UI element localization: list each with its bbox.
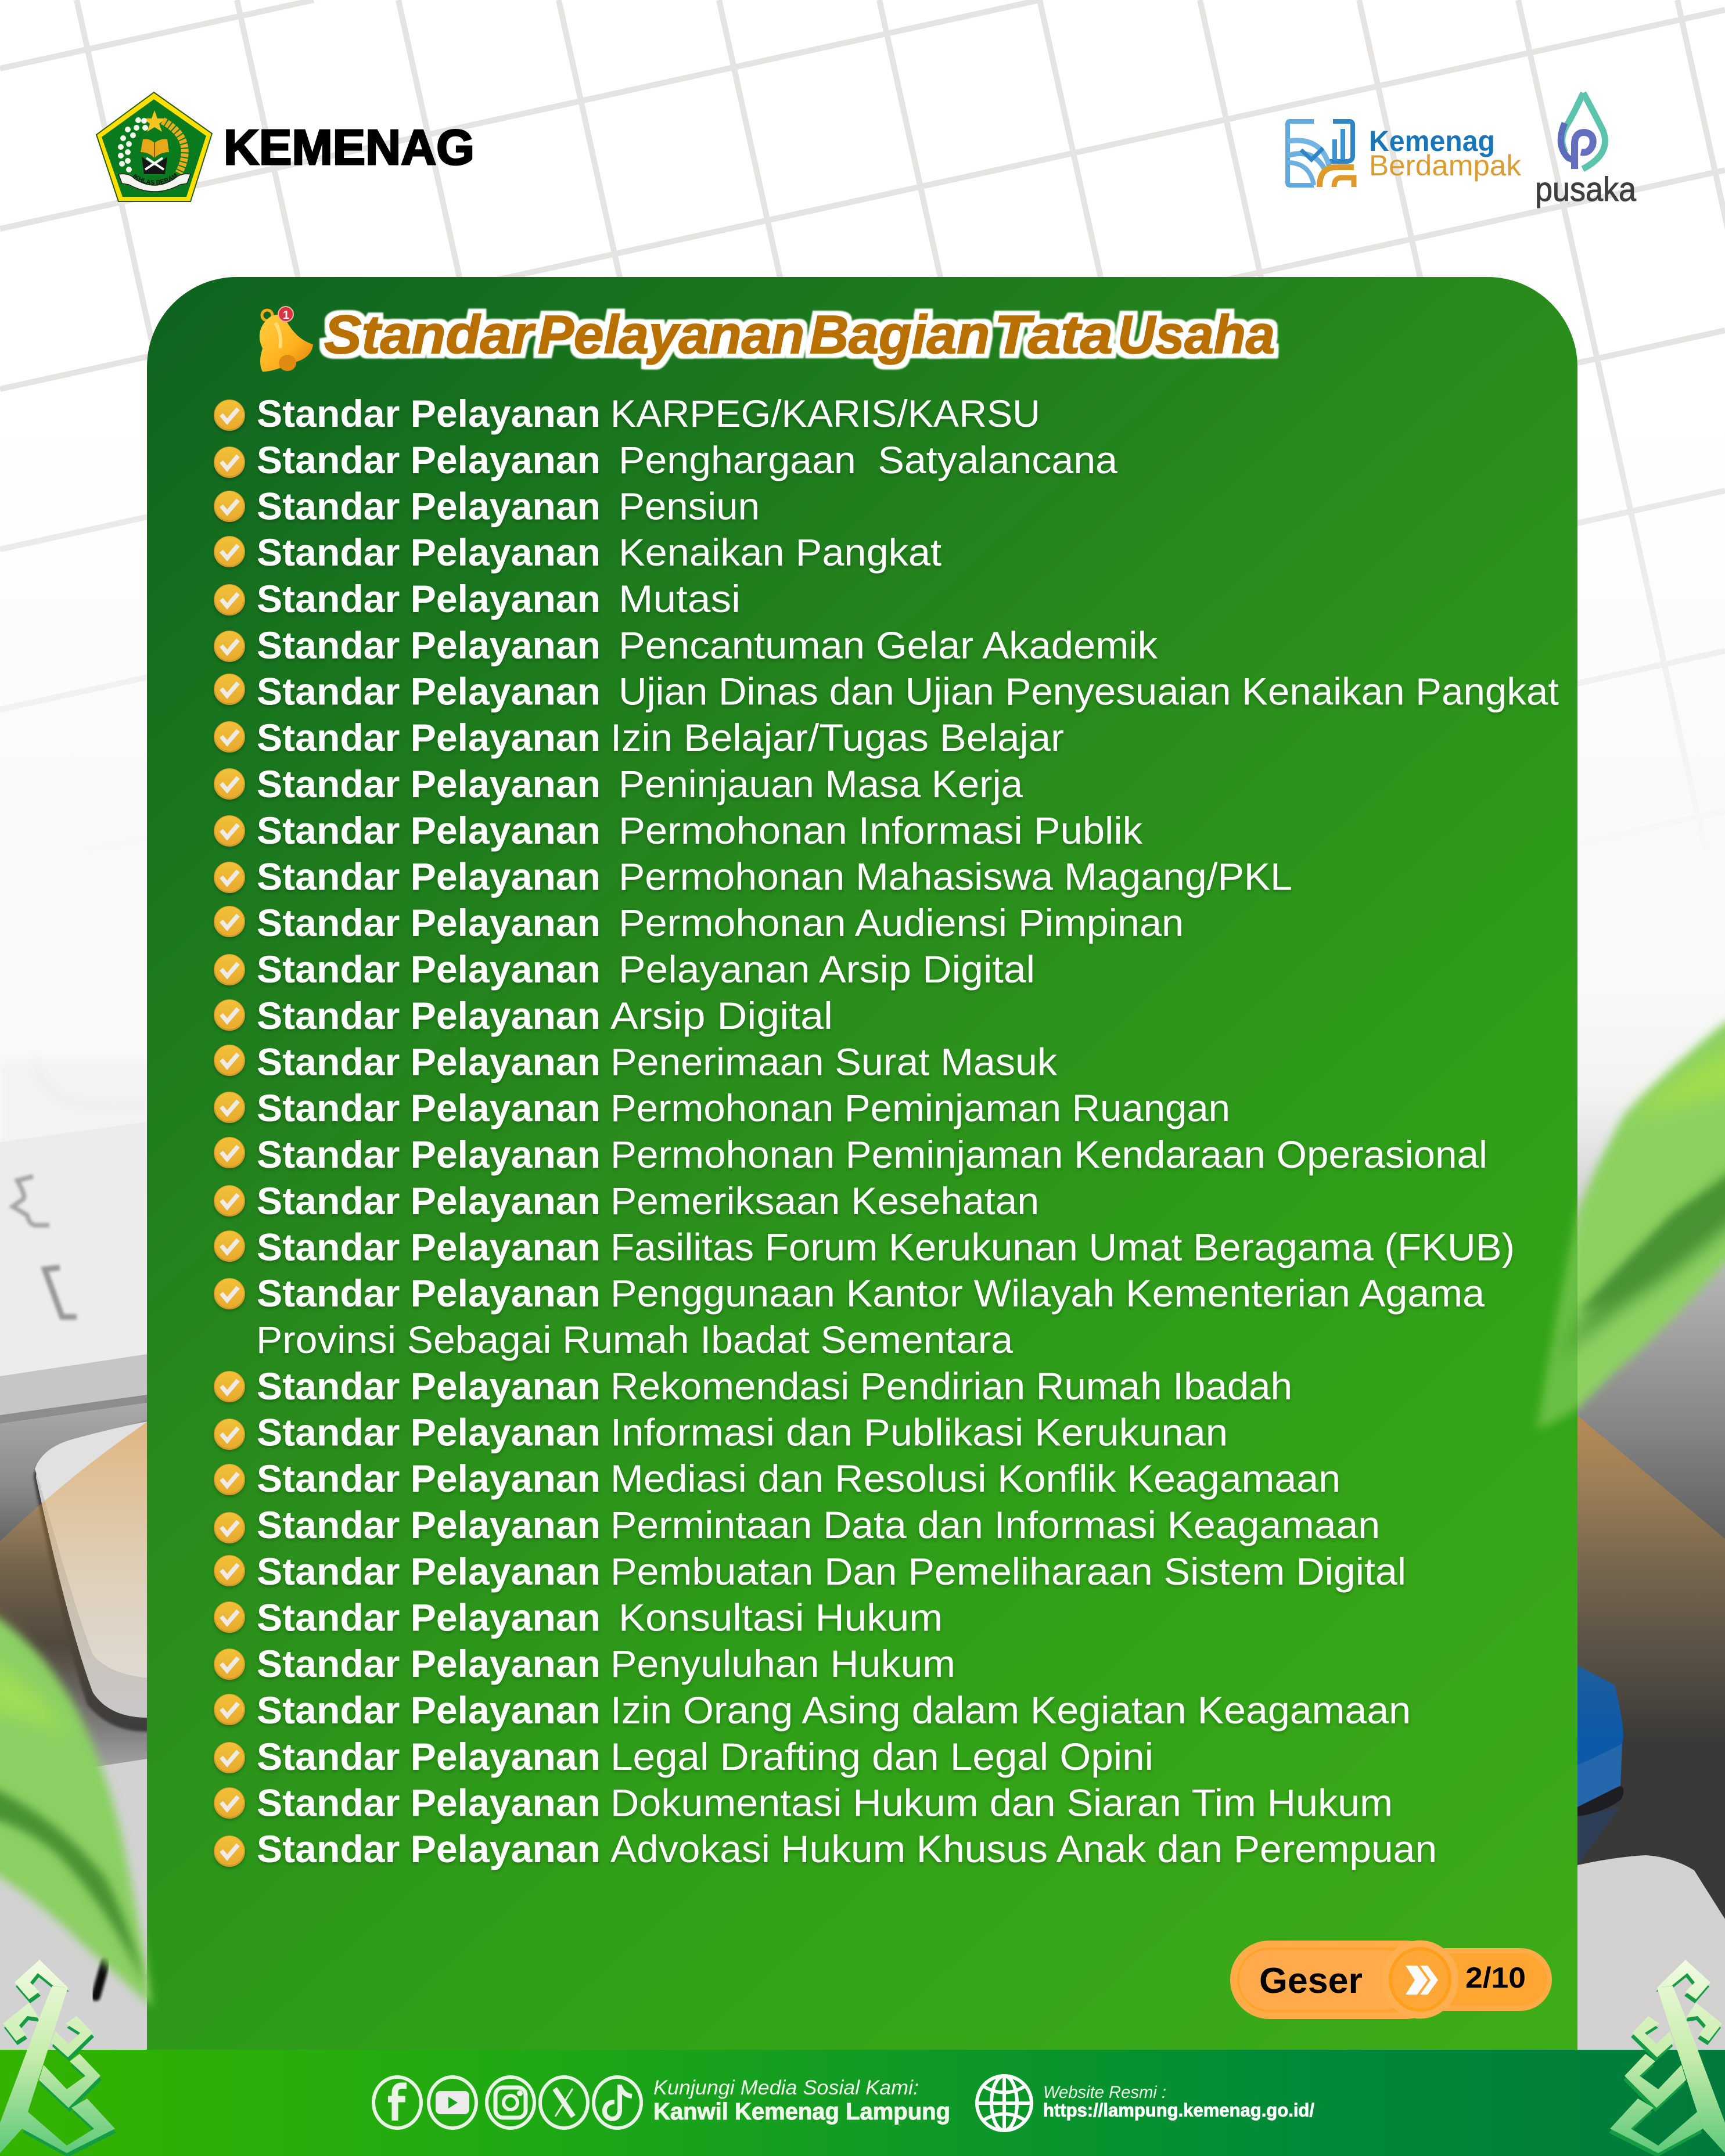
list item: Izin Orang Asing: Standar Pelayanan [257, 1689, 601, 1732]
ornament: bottom-left [0, 1960, 116, 2156]
list item: Advokasi Hukum [214, 1827, 1437, 1870]
list item: Izin Belajar: Izin Belajar/Tugas Belajar [610, 716, 1064, 759]
background: translucent tan dome [0, 1416, 1725, 1800]
list item: Fasilitas FKUB: Standar Pelayanan [257, 1225, 601, 1268]
list item: Penggunaan Kantor Wilayah: Penggunaan Kantor Wilayah Kementerian Agama [610, 1272, 1485, 1315]
list item: Informasi dan Publikasi Kerukunan: Standar Pelayanan [257, 1411, 601, 1454]
service standards checklist [214, 392, 1559, 1870]
list item: Pemeriksaan Kesehatan: Pemeriksaan Kesehatan [610, 1179, 1039, 1222]
list item: Pelayanan Arsip Digital: Pelayanan Arsip Digital [619, 948, 1035, 991]
caption line: Kunjungi Media Sosial Kami: Kunjungi Media Sosial Kami: [653, 2076, 919, 2099]
list item: Informasi dan Publikasi Kerukunan [214, 1411, 1228, 1454]
list item: Peninjauan Masa Kerja [214, 762, 1023, 805]
emblem wheat [163, 121, 185, 173]
heading: Standar Pelayanan Bagian Tata Usaha: Bagian [810, 304, 990, 365]
list item: Permohonan Peminjaman Ruangan: Standar Pelayanan [257, 1086, 601, 1129]
list item: Arsip Digital [214, 994, 833, 1037]
list item: Permohonan Informasi Publik: Permohonan Informasi Publik [619, 809, 1143, 852]
list item: Rekomendasi Pendirian Rumah Ibadah: Standar Pelayanan [257, 1365, 601, 1408]
list item: Fasilitas FKUB [214, 1225, 1515, 1268]
list item: Pelayanan Arsip Digital: Standar Pelayanan [257, 948, 601, 991]
list item: Penghargaan Satyalancana: Standar Pelayanan [257, 438, 601, 481]
list item: Penerimaan Surat Masuk [214, 1041, 1058, 1084]
swipe button: Geser 2/10 [1230, 1941, 1552, 2019]
list item: Permohonan Informasi Publik: Standar Pelayanan [257, 809, 601, 852]
list item: Pemeriksaan Kesehatan: Standar Pelayanan [257, 1179, 601, 1222]
list item: Permohonan Mahasiswa Magang [214, 855, 1292, 898]
list item: Permintaan Data: Standar Pelayanan [257, 1503, 601, 1546]
icon: facebook [373, 2077, 421, 2128]
list item: Pensiun: Pensiun [619, 484, 760, 527]
list item: Penyuluhan Hukum: Penyuluhan Hukum [610, 1642, 955, 1685]
list item: Legal Drafting [214, 1735, 1153, 1778]
list item: Penghargaan Satyalancana: Penghargaan Satyalancana [619, 438, 1117, 481]
list item: Penggunaan Kantor Wilayah [214, 1272, 1485, 1361]
heading: Standar Pelayanan Bagian Tata Usaha: Pelayanan [538, 304, 804, 365]
list item: Permohonan Audiensi Pimpinan [214, 901, 1184, 944]
list item: Penyuluhan Hukum [214, 1642, 955, 1685]
list item: Pensiun: Standar Pelayanan [257, 484, 601, 527]
list item: Advokasi Hukum: Advokasi Hukum Khusus Anak dan Perempuan [610, 1827, 1437, 1870]
list item: Permintaan Data [214, 1503, 1380, 1546]
logo text: Kemenag: Kemenag [1369, 125, 1495, 157]
list item: Izin Belajar: Standar Pelayanan [257, 716, 601, 759]
header logo: Kemenag emblem [95, 92, 213, 202]
blurred leaf stem, left [96, 1961, 106, 1996]
page counter pill [1394, 1948, 1552, 2011]
icon: globe [977, 2076, 1032, 2130]
list item: Legal Drafting: Legal Drafting dan Legal Opini [610, 1735, 1153, 1778]
list item: Permohonan Audiensi Pimpinan: Permohonan Audiensi Pimpinan [619, 901, 1184, 944]
social media icons [373, 2077, 641, 2128]
emblem crossed stand [142, 157, 167, 174]
list item: Dokumentasi Hukum: Dokumentasi Hukum dan Siaran Tim Hukum [610, 1781, 1393, 1824]
list item: Pencantuman Gelar Akademik: Standar Pelayanan [257, 624, 601, 667]
footer bar [0, 2050, 1725, 2156]
list item: Pembuatan Sistem Digital: Pembuatan Dan Pemeliharaan Sistem Digital [610, 1550, 1406, 1593]
background: blurred keyboard, right side [1568, 987, 1725, 2061]
heading: Standar Pelayanan Bagian Tata Usaha: Standar [324, 304, 536, 365]
caption line: Website Resmi: Website Resmi : [1043, 2083, 1166, 2102]
caption line: Kanwil Kemenag Lampung: Kanwil Kemenag Lampung [653, 2098, 950, 2125]
geser label: Geser [1259, 1961, 1363, 2001]
icon: double chevron [1406, 1966, 1428, 1995]
list item: Mediasi dan Resolusi Konflik [214, 1457, 1341, 1500]
leaf, left [0, 1611, 152, 2007]
emblem cotton branch [118, 117, 148, 172]
website caption [1043, 2083, 1314, 2121]
logo text: pusaka: pusaka [1535, 171, 1637, 208]
list item: Advokasi Hukum: Standar Pelayanan [257, 1827, 601, 1870]
list item: Permohonan Peminjaman Ruangan: Permohonan Peminjaman Ruangan [610, 1086, 1230, 1129]
list item: Pelayanan Arsip Digital [214, 948, 1035, 991]
list item: Pencantuman Gelar Akademik [214, 624, 1158, 667]
icon: instagram [487, 2077, 534, 2128]
heading: Standar Pelayanan Bagian Tata Usaha [324, 304, 1275, 365]
list item: Pembuatan Sistem Digital: Standar Pelayanan [257, 1550, 601, 1593]
logo: Kemenag Berdampak [1288, 121, 1522, 187]
list item: Penerimaan Surat Masuk: Standar Pelayanan [257, 1041, 601, 1084]
ornament: bottom-right [1609, 1960, 1725, 2156]
geser pill [1230, 1941, 1445, 2019]
leaf, right [1537, 1016, 1725, 1428]
page number: 2/10 [1465, 1961, 1526, 1994]
list item: Permohonan Informasi Publik [214, 809, 1143, 852]
list item: Konsultasi Hukum: Konsultasi Hukum [619, 1596, 943, 1639]
background: blurred keyboard, left side [0, 1057, 151, 2056]
emblem star [143, 110, 166, 132]
list item: Arsip Digital: Arsip Digital [610, 994, 833, 1037]
heading: Standar Pelayanan Bagian Tata Usaha: Usaha [1117, 304, 1275, 365]
list item: Pemeriksaan Kesehatan [214, 1179, 1039, 1222]
list item: Permohonan Mahasiswa Magang: Permohonan Mahasiswa Magang/PKL [619, 855, 1292, 898]
list item: Ujian Dinas [214, 670, 1559, 713]
list item: Peninjauan Masa Kerja: Peninjauan Masa Kerja [619, 762, 1023, 805]
list item: Konsultasi Hukum: Standar Pelayanan [257, 1596, 601, 1639]
list item: Kenaikan Pangkat [214, 531, 941, 574]
icon: notification bell: 1 [283, 309, 289, 322]
list item: Pencantuman Gelar Akademik: Pencantuman Gelar Akademik [619, 624, 1158, 667]
list item: Pensiun [214, 484, 760, 527]
header wordmark: KEMENAG: KEMENAG [224, 120, 475, 175]
list item: Kenaikan Pangkat: Kenaikan Pangkat [619, 531, 941, 574]
list item: Izin Belajar [214, 716, 1064, 759]
list item: Mutasi [214, 577, 741, 620]
list item: Penggunaan Kantor Wilayah: Standar Pelayanan [257, 1272, 601, 1315]
list item: Dokumentasi Hukum: Standar Pelayanan [257, 1781, 601, 1824]
logo text: Berdampak: Berdampak [1369, 149, 1522, 182]
arrow knob [1382, 1941, 1458, 2018]
list item: Izin Orang Asing [214, 1689, 1411, 1732]
list item: Informasi dan Publikasi Kerukunan: Informasi dan Publikasi Kerukunan [610, 1411, 1228, 1454]
list item: Pembuatan Sistem Digital [214, 1550, 1406, 1593]
icon: tiktok [594, 2077, 641, 2128]
list item: Permohonan Peminjaman Ruangan [214, 1086, 1230, 1129]
social media caption [653, 2076, 950, 2125]
list item: KARPEG/KARIS/KARSU: Standar Pelayanan [257, 392, 601, 435]
caption line: website url: https://lampung.kemenag.go.id/ [1043, 2100, 1314, 2121]
icon: notification bell [260, 307, 313, 372]
list item: Dokumentasi Hukum [214, 1781, 1393, 1824]
list item: Permohonan Peminjaman Kendaraan: Standar Pelayanan [257, 1133, 601, 1176]
list item: Penerimaan Surat Masuk: Penerimaan Surat Masuk [610, 1041, 1058, 1084]
logo icon: blue and gold square [1288, 121, 1354, 187]
list item: Konsultasi Hukum [214, 1596, 943, 1639]
list item: Kenaikan Pangkat: Standar Pelayanan [257, 531, 601, 574]
heading: Standar Pelayanan Bagian Tata Usaha: Tata [994, 304, 1113, 365]
list item: Fasilitas FKUB: Fasilitas Forum Kerukunan Umat Beragama (FKUB) [610, 1225, 1515, 1268]
list item: Mediasi dan Resolusi Konflik: Standar Pelayanan [257, 1457, 601, 1500]
list item: Permohonan Audiensi Pimpinan: Standar Pelayanan [257, 901, 601, 944]
list item: Penyuluhan Hukum: Standar Pelayanan [257, 1642, 601, 1685]
list item: Penggunaan Kantor Wilayah: Provinsi Sebagai Rumah Ibadat Sementara [256, 1318, 1013, 1361]
list item: KARPEG/KARIS/KARSU [214, 392, 1040, 435]
list item: Izin Orang Asing: Izin Orang Asing dalam Kegiatan Keagamaan [610, 1689, 1411, 1732]
list item: Mediasi dan Resolusi Konflik: Mediasi dan Resolusi Konflik Keagamaan [610, 1457, 1341, 1500]
icon: X [540, 2077, 588, 2128]
list item: Peninjauan Masa Kerja: Standar Pelayanan [257, 762, 601, 805]
list item: Mutasi: Mutasi [619, 577, 741, 620]
main green panel [147, 277, 1577, 2050]
list item: Rekomendasi Pendirian Rumah Ibadah [214, 1365, 1292, 1408]
list item: Ujian Dinas: Standar Pelayanan [257, 670, 601, 713]
icon: youtube [429, 2077, 476, 2128]
emblem book [141, 139, 169, 158]
emblem banner [118, 174, 191, 192]
logo: pusaka [1535, 93, 1637, 208]
list item: Permohonan Peminjaman Kendaraan: Permohonan Peminjaman Kendaraan Operasional [610, 1133, 1487, 1176]
list item: Permohonan Peminjaman Kendaraan [214, 1133, 1487, 1176]
list item: Rekomendasi Pendirian Rumah Ibadah: Rekomendasi Pendirian Rumah Ibadah [610, 1365, 1292, 1408]
list item: Ujian Dinas: Ujian Dinas dan Ujian Penyesuaian Kenaikan Pangkat [619, 670, 1559, 713]
list item: KARPEG/KARIS/KARSU: KARPEG/KARIS/KARSU [610, 392, 1040, 435]
list item: Legal Drafting: Standar Pelayanan [257, 1735, 601, 1778]
list item: Mutasi: Standar Pelayanan [257, 577, 601, 620]
list item: Permohonan Mahasiswa Magang: Standar Pelayanan [257, 855, 601, 898]
list item: Penghargaan Satyalancana [214, 438, 1117, 481]
list item: Arsip Digital: Standar Pelayanan [257, 994, 601, 1037]
list item: Permintaan Data: Permintaan Data dan Informasi Keagamaan [610, 1503, 1380, 1546]
logo icon: drop [1561, 93, 1605, 169]
